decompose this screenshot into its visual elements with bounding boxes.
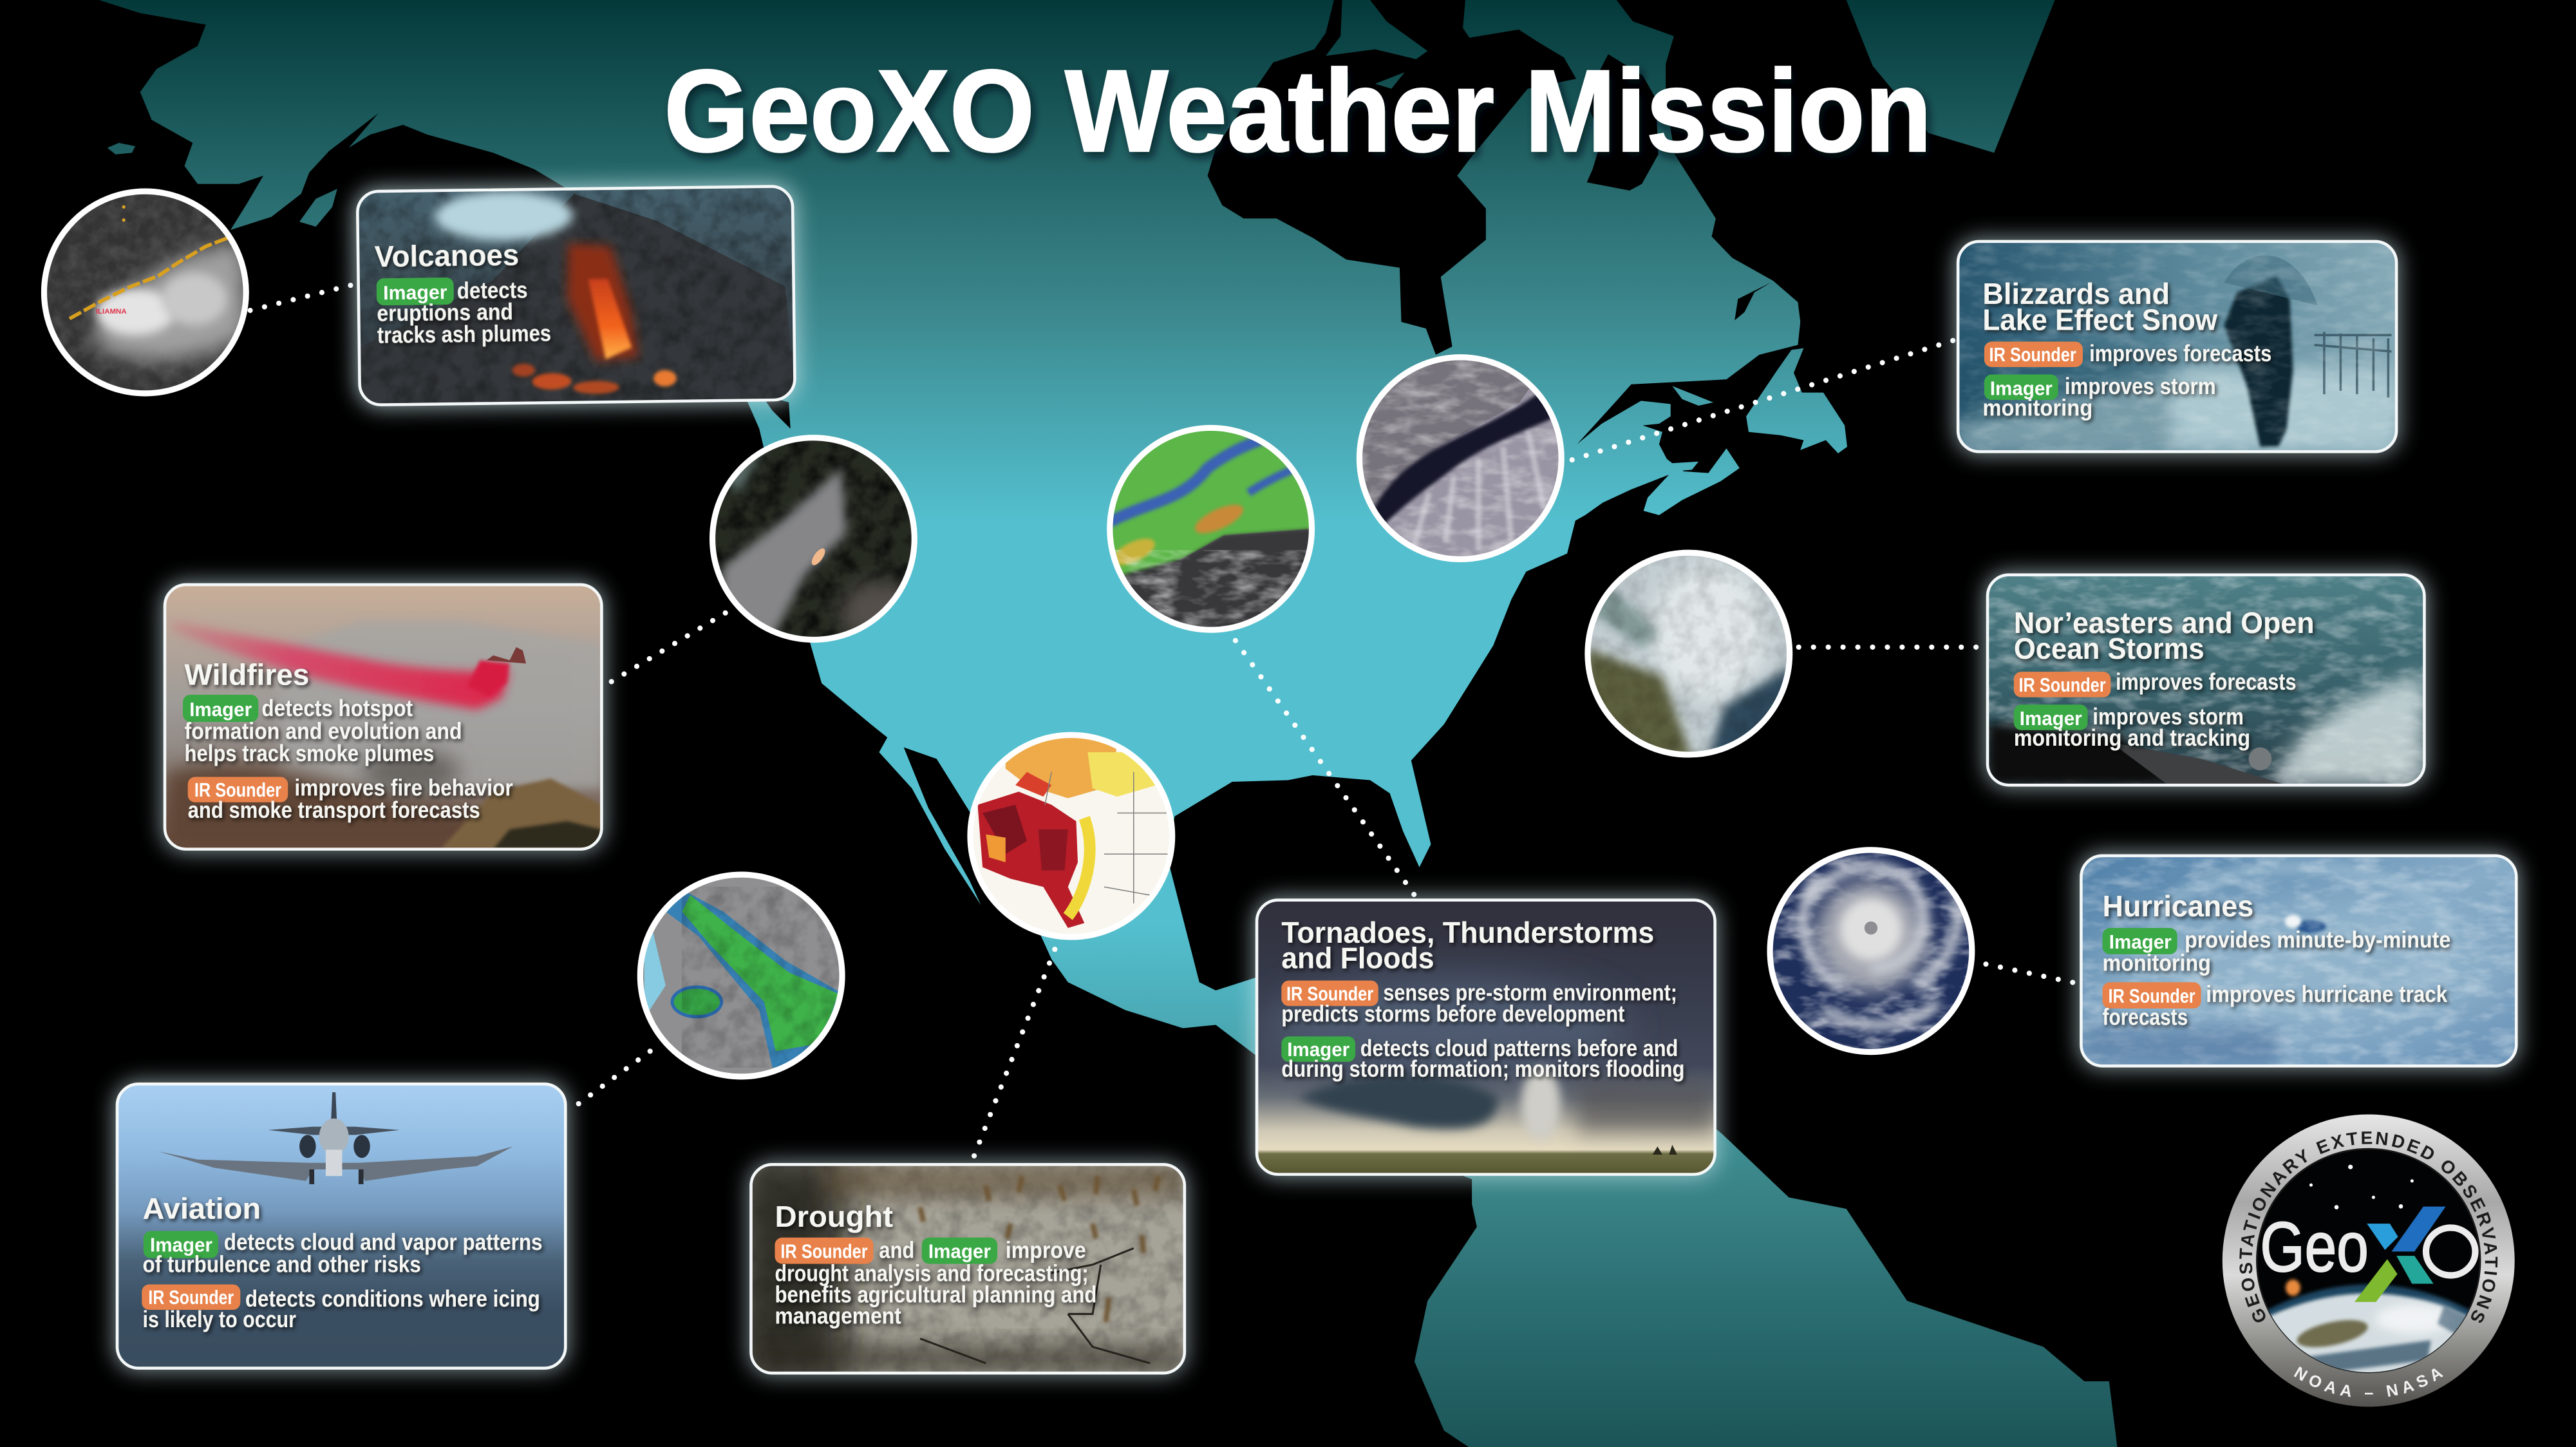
description: detects cloud and vapor patterns — [224, 1229, 543, 1255]
description — [377, 277, 551, 348]
badge: IR Sounder — [1281, 981, 1378, 1006]
badge label: Imager — [383, 281, 447, 304]
connector: aviation — [579, 1045, 659, 1104]
badge label: IR Sounder — [1989, 344, 2076, 366]
Newfoundland — [1746, 348, 1847, 453]
heading: Lake Effect Snow — [1982, 303, 2217, 337]
description: is likely to occur — [143, 1307, 296, 1332]
photo: open ocean — [1988, 575, 2424, 785]
description: and smoke transport forecasts — [188, 797, 480, 823]
connector: blizzard — [1572, 340, 1955, 460]
description: senses pre-storm environment; — [1383, 979, 1677, 1005]
description: improves storm — [2092, 704, 2244, 730]
photo: business jet — [117, 1084, 565, 1368]
ring text top: GEOSTATIONARY EXTENDED OBSERVATIONS — [2239, 1131, 2498, 1323]
description: benefits agricultural planning and — [775, 1282, 1096, 1308]
badge: Imager — [922, 1238, 997, 1264]
badge: Imager — [2014, 705, 2088, 730]
badge: IR Sounder — [2014, 672, 2111, 697]
connector: hurricane — [1986, 964, 2080, 984]
connector: drought — [973, 949, 1055, 1160]
description: eruptions and — [377, 299, 513, 326]
badge label: Imager — [2109, 931, 2172, 953]
Prince Edward Island — [1672, 386, 1713, 406]
badge label: IR Sounder — [2018, 674, 2106, 696]
heading — [2014, 606, 2315, 665]
badge label: Imager — [1287, 1039, 1349, 1061]
panel: blizzards — [1958, 241, 2396, 451]
heading: Hurricanes — [2103, 889, 2253, 923]
heading: and Floods — [1281, 941, 1434, 975]
connector: tornado — [1236, 641, 1415, 895]
satellite circle: volcano: ILIAMNA — [96, 308, 127, 316]
description: predicts storms before development — [1281, 1001, 1624, 1026]
wordmark O — [2426, 1228, 2476, 1275]
panel: drought — [731, 1149, 1185, 1388]
description: improves fire behavior — [294, 775, 513, 801]
Gulf islands — [1657, 451, 1698, 471]
badge label: IR Sounder — [1286, 983, 1373, 1005]
badge label: IR Sounder — [148, 1287, 234, 1309]
satellite circle: drought map — [970, 734, 1173, 938]
description: detects — [457, 278, 528, 304]
description: of turbulence and other risks — [143, 1251, 421, 1277]
heading — [1982, 277, 2217, 337]
Arctic leaf island — [1375, 72, 1405, 89]
description: improves forecasts — [2089, 341, 2271, 366]
logo: GeoXO mission patch — [2223, 1114, 2515, 1406]
photo: hurricane from space — [2081, 856, 2516, 1066]
Ungava Bay — [1585, 54, 1659, 191]
description — [185, 695, 513, 823]
description: management — [775, 1303, 901, 1329]
description: detects hotspot — [261, 695, 413, 721]
satellite circle: volcano — [42, 189, 249, 396]
Anticosti inlet — [1735, 283, 1771, 320]
photo: aerial firefighting — [165, 585, 601, 849]
heading: Tornadoes, Thunderstorms — [1281, 916, 1654, 949]
description: formation and evolution and — [185, 719, 462, 744]
connector: wildfire — [612, 609, 731, 681]
description: drought analysis and forecasting; — [775, 1260, 1089, 1286]
panel: volcanoes — [357, 186, 795, 405]
photo: cracked earth — [731, 1149, 1185, 1388]
badge label: IR Sounder — [780, 1241, 868, 1263]
description: detects cloud patterns before and — [1360, 1036, 1678, 1061]
panel: wildfires — [165, 585, 601, 849]
description — [1982, 341, 2271, 421]
description: monitoring and tracking — [2014, 725, 2250, 751]
badge label: IR Sounder — [194, 779, 281, 801]
heading: Wildfires — [185, 658, 309, 692]
description — [775, 1238, 1096, 1329]
panel: hurricanes — [2081, 856, 2516, 1066]
badge label: IR Sounder — [2108, 985, 2195, 1007]
description: improves storm — [2065, 374, 2216, 399]
badge label: Imager — [189, 699, 252, 721]
wordmark: Geo — [2260, 1208, 2369, 1287]
map: North and South America — [99, 0, 2118, 1447]
description: monitoring — [1982, 395, 2092, 421]
description — [1281, 979, 1684, 1082]
Hudson Bay and Arctic channels — [1208, 0, 1576, 355]
Kodiak island — [299, 189, 337, 227]
panel: nor'easters — [1988, 575, 2424, 785]
satellite circle: aviation radar — [639, 874, 843, 1077]
badge label: Imager — [2020, 708, 2082, 730]
description: improves forecasts — [2116, 669, 2297, 695]
satellite circle: nor'easter — [1587, 552, 1794, 759]
earth and stars — [2253, 1165, 2483, 1376]
badge label: Imager — [1990, 377, 2053, 399]
badge label: Imager — [928, 1241, 991, 1263]
badge: Imager — [377, 278, 454, 305]
description — [143, 1229, 543, 1332]
photo: supercell — [1257, 900, 1715, 1175]
heading: Volcanoes — [374, 238, 519, 273]
description: improves hurricane track — [2206, 981, 2447, 1007]
title: GeoXO Weather Mission — [664, 46, 1932, 176]
description: improve — [1006, 1238, 1086, 1263]
heading: Ocean Storms — [2014, 632, 2205, 665]
badge: IR Sounder — [2103, 982, 2201, 1008]
heading — [1281, 916, 1654, 975]
badge label: Imager — [150, 1234, 212, 1256]
description: and — [879, 1238, 914, 1263]
badge: Imager — [1281, 1036, 1355, 1062]
photo: volcano — [357, 186, 795, 405]
badge: Imager — [1984, 375, 2058, 400]
satellite circle: wildfire — [711, 437, 919, 644]
description: monitoring — [2103, 950, 2211, 976]
connector: nor'easter — [1799, 646, 1984, 648]
badge: IR Sounder — [1984, 342, 2083, 367]
description: forecasts — [2103, 1005, 2188, 1030]
heading: Aviation — [143, 1191, 261, 1225]
description: tracks ash plumes — [377, 321, 551, 348]
description: helps track smoke plumes — [185, 741, 434, 766]
badge: Imager — [183, 695, 258, 722]
description — [2014, 669, 2297, 751]
Pacific sliver — [761, 394, 791, 429]
description: provides minute-by-minute — [2185, 927, 2450, 953]
satellite circle: lake effect snow — [1359, 356, 1562, 560]
badge: IR Sounder — [188, 777, 288, 802]
description: during storm formation; monitors flooding — [1281, 1056, 1684, 1082]
description: detects conditions where icing — [245, 1286, 540, 1312]
metal ring — [2223, 1115, 2515, 1407]
heading: Nor’easters and Open — [2014, 606, 2315, 639]
description — [2103, 927, 2450, 1030]
Greenland — [1847, 0, 2055, 153]
Aleutian island — [108, 143, 135, 155]
badge: IR Sounder — [775, 1238, 873, 1264]
badge: Imager — [144, 1231, 218, 1258]
panel: aviation — [117, 1084, 565, 1368]
heading: Drought — [775, 1200, 893, 1233]
aircraft — [158, 1092, 513, 1184]
photo: walker in snowstorm — [1958, 241, 2396, 451]
satellite circle: hurricane — [1769, 849, 1973, 1053]
panel: tornadoes — [1257, 900, 1715, 1175]
satellite circle: thunderstorm radar — [1109, 427, 1313, 630]
X mark — [2355, 1207, 2446, 1302]
connector: volcano — [250, 284, 355, 310]
badge: IR Sounder — [142, 1284, 240, 1310]
heading: Blizzards and — [1982, 277, 2170, 310]
badge: Imager — [2103, 928, 2177, 954]
ring text bottom: NOAA – NASA — [2293, 1367, 2443, 1397]
